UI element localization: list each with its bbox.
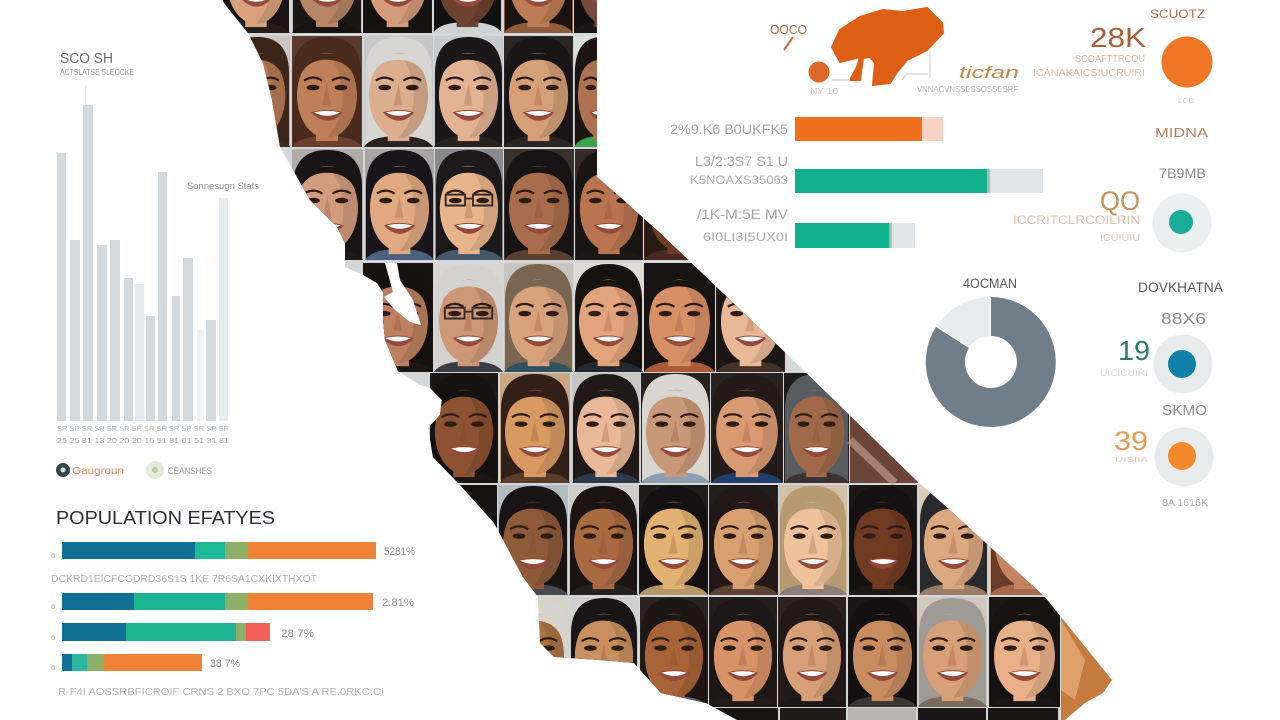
- heading: DOVKHATNA: [1138, 279, 1224, 295]
- caption line 1: DCKRD1EICFCGDRD36S1S 1KE 7R6SA1CXKIXTHXOT: [51, 574, 317, 585]
- bar 3: 28 7%: [281, 628, 314, 640]
- region note left: NY 10: [810, 87, 839, 96]
- value: 19: [1118, 335, 1150, 366]
- portrait row 5: [430, 373, 918, 483]
- panel: top-right stat: [1033, 7, 1212, 105]
- caption line 2: R-F4I AOSSRBFICROIF CRNS 2 BXO 7PC 5DA'S A RE.0RKC.CI: [58, 687, 384, 698]
- heading: POPULATION EFATYES: [56, 508, 275, 528]
- legend: Gaugroun: [72, 466, 124, 477]
- description: SCOAFTTRCOU: [1075, 54, 1145, 65]
- portrait row 4: [363, 263, 785, 372]
- bar 4: 38 7%: [210, 658, 240, 670]
- bar 3: [51, 623, 314, 642]
- metric note: ICUIUIU: [1100, 233, 1140, 244]
- small value: OOCO: [770, 22, 807, 37]
- bar 3: o: [51, 633, 56, 642]
- icon: orange region blob: [832, 8, 943, 85]
- panel: donut chart: [926, 275, 1056, 427]
- connector lines: [832, 52, 930, 80]
- value: 28K: [1090, 22, 1146, 53]
- panel: blue metric: [1100, 279, 1224, 394]
- metric description: ICCRITCLRCOILRIN: [1013, 213, 1140, 227]
- row 3 bar: [795, 223, 915, 248]
- row 3 label second line: 6I0LI3I5UX0I: [703, 230, 788, 244]
- small note: LCD: [1178, 98, 1194, 105]
- bar 2: [51, 593, 414, 611]
- metric value: QO: [1100, 186, 1140, 216]
- axis labels: SR SR SR SR SR SR SR SR SR SR SR SR SR SR: [57, 426, 229, 433]
- legend: CEANSHES: [168, 466, 212, 476]
- panel: population stacked bars: [51, 508, 415, 698]
- bar 1: o: [51, 551, 56, 560]
- panel: orange metric: [1114, 402, 1214, 509]
- value: 39: [1114, 426, 1148, 456]
- annotation: series label: Sonnesugn Stats: [187, 181, 260, 191]
- portrait row 8: [700, 708, 1058, 720]
- bar 2: 2.81%: [382, 597, 414, 609]
- legend: [56, 461, 212, 479]
- description second line: ICANAKAICSIUCRUIRI: [1033, 68, 1145, 79]
- donut title: 4OCMAN: [963, 275, 1017, 291]
- panel: portrait mosaic in state silhouette: [200, 0, 1130, 720]
- row 2 label: L3/2:3S7 S1 U: [695, 153, 788, 169]
- icon: blue ring: [1154, 334, 1212, 394]
- description: UICICUIRI: [1100, 368, 1148, 378]
- columns: [57, 85, 228, 421]
- bar 1: 5281%: [384, 546, 415, 558]
- sublabel: SKMO: [1162, 402, 1207, 419]
- icon: orange ring: [1154, 428, 1214, 486]
- donut light segment: [937, 297, 990, 347]
- row 2 label second line: K5NOAXS35063: [690, 173, 788, 187]
- white notch in silhouette: [384, 263, 421, 325]
- stat label: SCUOTZ: [1150, 7, 1205, 21]
- bar 2: o: [51, 602, 56, 611]
- chart title: SCO SH: [60, 50, 113, 67]
- metric sublabel: 7B9MB: [1159, 165, 1206, 181]
- region note: VNNACVNSSESSOSSESRF: [917, 85, 1018, 94]
- panel: teal metric: [1013, 125, 1212, 252]
- panel: horizontal progress bars: [670, 117, 1043, 248]
- sublabel: 88X6: [1161, 311, 1206, 328]
- note: 8A 1616K: [1162, 498, 1208, 509]
- portrait row 7: [500, 597, 1121, 720]
- row 2 bar: [795, 169, 1043, 193]
- icon: teal ring: [1152, 194, 1212, 252]
- region label: ticfan: [959, 63, 1019, 82]
- portrait row 1: [222, 0, 634, 33]
- axis labels second row: 25 25 81 13 20 20 20 15 51 81 61 51 31 81: [57, 438, 229, 445]
- bar 4: o: [51, 663, 56, 672]
- row 3 label: /1K-M:5E MV: [697, 206, 789, 222]
- metric heading: MIDNA: [1155, 125, 1208, 140]
- panel: column chart: [56, 50, 260, 479]
- icon: small orange dot: [808, 62, 830, 82]
- description: UISIIA: [1115, 457, 1149, 464]
- bar 1: [51, 542, 415, 560]
- panel: map statistic: [770, 8, 1019, 96]
- portrait row 3: [292, 149, 712, 260]
- row 1 bar: [795, 117, 943, 141]
- icon: orange circle: [1162, 36, 1212, 88]
- bar 4: [51, 654, 240, 672]
- pointer stroke: [784, 37, 793, 50]
- portrait row 2: [250, 36, 597, 147]
- row 1 label: 2%9.K6 B0UKFK5: [670, 121, 788, 137]
- portrait row 6: [430, 485, 1060, 595]
- donut main segment: [926, 297, 1056, 427]
- chart subtitle: ACTSLATSE SLEOCKE: [60, 68, 134, 77]
